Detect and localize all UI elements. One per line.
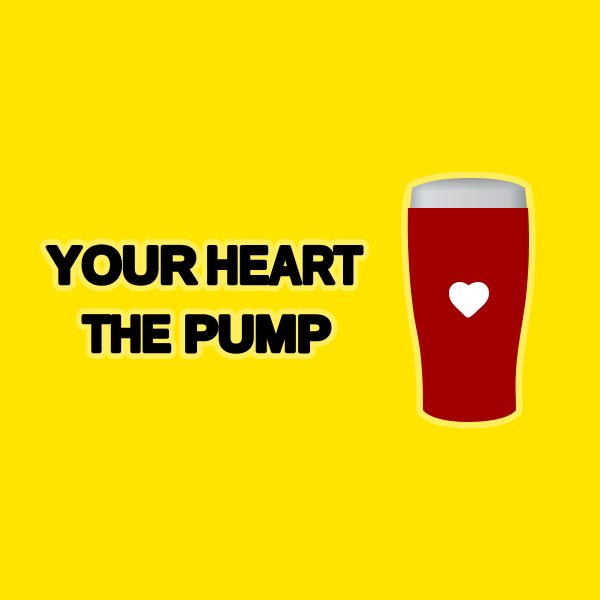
foam head: [410, 178, 527, 208]
title line 1: YOUR: [47, 237, 197, 295]
title line 2: PUMP: [184, 306, 331, 362]
title line 1: HEART: [206, 237, 362, 295]
icon: pint glass: [408, 178, 529, 422]
title line 2: THE: [83, 306, 171, 362]
title line 2: PUMP: [184, 306, 331, 362]
beer body: [408, 208, 529, 422]
title: your heart the pump: [47, 237, 362, 362]
icon: heart: [449, 282, 489, 318]
title line 1: HEART: [206, 237, 362, 295]
title line 2: THE: [83, 306, 171, 362]
title line 1: [47, 237, 362, 295]
title line 2: [83, 306, 331, 362]
glass halo: [408, 178, 529, 422]
title line 1: YOUR: [47, 237, 197, 295]
